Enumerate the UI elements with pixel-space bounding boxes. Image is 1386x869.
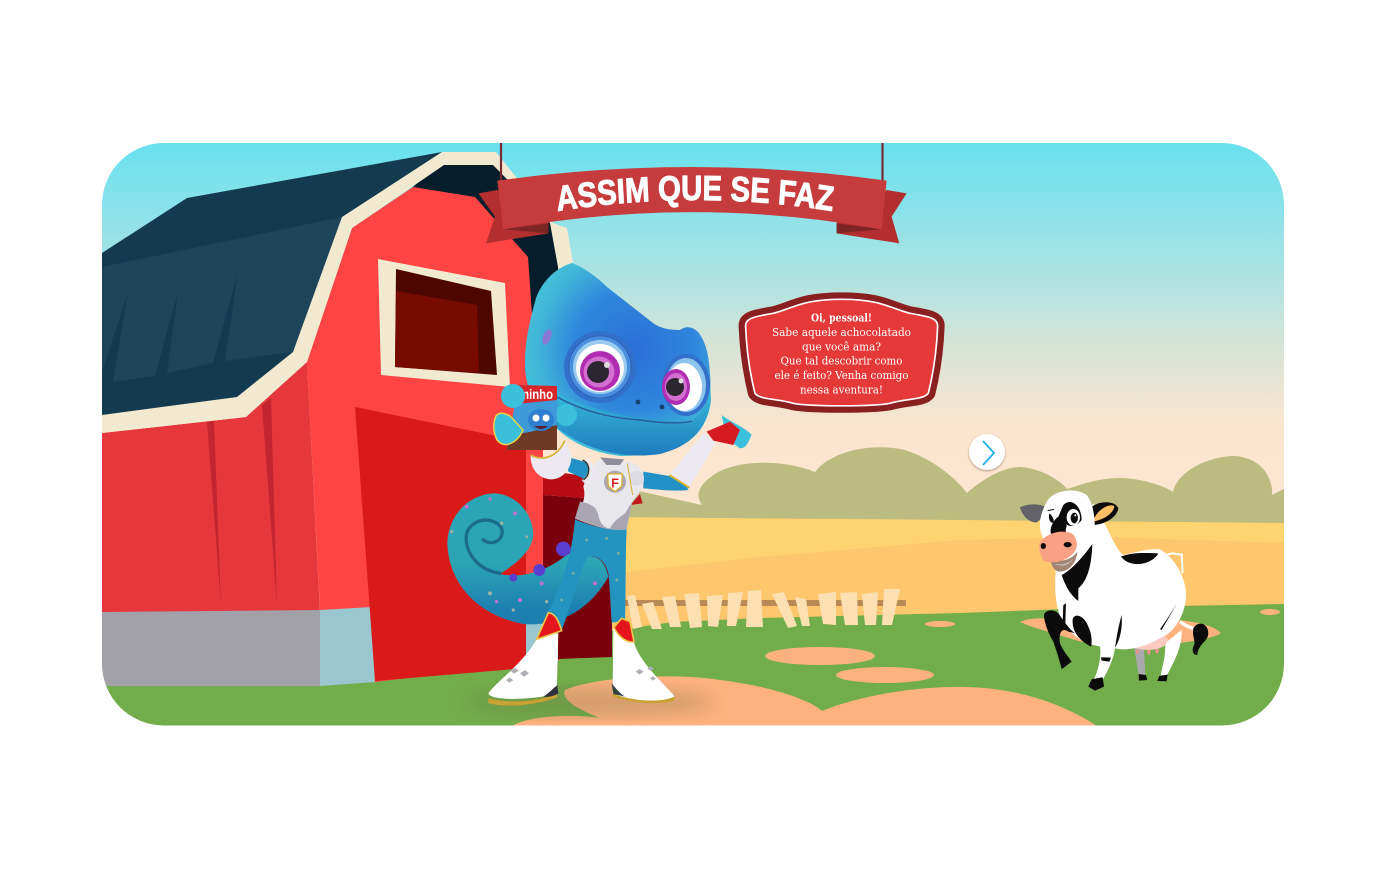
- large door: [355, 407, 612, 681]
- tail of cow: [1165, 553, 1208, 655]
- torso: [575, 457, 644, 530]
- bubble text: Que tal descobrir como: [780, 354, 903, 368]
- title banner: [478, 167, 906, 244]
- cow: [1020, 490, 1208, 691]
- right eye: [662, 354, 710, 416]
- speech bubble: [746, 299, 938, 406]
- mouth: [1050, 552, 1077, 572]
- left boot: [488, 613, 562, 706]
- left arm: [531, 438, 590, 480]
- roof: [102, 152, 442, 420]
- dirt paths: [512, 609, 1280, 726]
- hand holding chocolate milk box: [494, 384, 577, 450]
- hills: [625, 447, 1284, 525]
- muzzle: [1039, 532, 1077, 562]
- right arm: [643, 415, 752, 491]
- box label: minho: [519, 386, 553, 402]
- body: [1055, 503, 1186, 680]
- bubble text: Sabe aquele achocolatado: [772, 325, 911, 339]
- bubble text: Oi, pessoal!: [811, 310, 872, 324]
- front hoof: [1088, 677, 1104, 691]
- emblem: F: [611, 476, 619, 490]
- scene panel: farm: [102, 143, 1284, 726]
- tail: [447, 493, 608, 624]
- neck patch: [1062, 544, 1092, 601]
- legs: [547, 519, 627, 631]
- fence: [606, 589, 906, 629]
- side wall: [102, 362, 320, 612]
- bubble text: nessa aventura!: [800, 382, 883, 396]
- lower body: [447, 415, 752, 706]
- banner title text: ASSIM QUE SE FAZ: [558, 175, 834, 212]
- barn: [102, 152, 612, 686]
- bubble text: ele é feito? Venha comigo: [774, 368, 909, 382]
- face patches: [1048, 502, 1082, 535]
- udder: [1135, 636, 1168, 655]
- sky background: [102, 143, 1284, 726]
- hayloft window: [378, 259, 510, 387]
- banner ribbon: [478, 167, 907, 243]
- right ear: [1088, 502, 1118, 525]
- bubble text: que você ama?: [802, 340, 881, 354]
- hanging ropes: [501, 143, 882, 182]
- bubble text: [772, 310, 911, 396]
- left eye: [564, 331, 636, 403]
- cape: [631, 494, 643, 505]
- next arrow button: [969, 434, 1005, 470]
- body marks: [1063, 603, 1177, 662]
- bubble frame: [746, 299, 938, 406]
- left ear: [1020, 504, 1044, 523]
- green ground: [102, 604, 1284, 726]
- front raised leg: [1044, 610, 1075, 669]
- roof trim: [102, 152, 573, 433]
- main red wall: [307, 187, 560, 682]
- head: [1040, 490, 1095, 553]
- head: [525, 263, 711, 456]
- far legs: [1134, 630, 1182, 681]
- wheat field: [600, 517, 1284, 640]
- right boot: [612, 618, 675, 703]
- back patch: [1121, 553, 1158, 564]
- attic shadow: [412, 165, 558, 314]
- ground shadow: [465, 686, 715, 718]
- stone base: [102, 607, 375, 686]
- chameleon character: [447, 263, 752, 706]
